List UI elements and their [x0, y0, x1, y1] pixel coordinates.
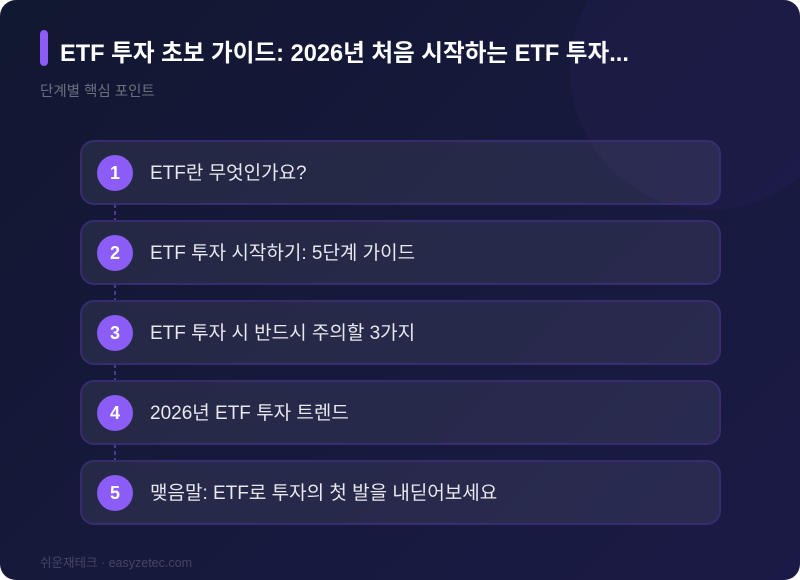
- connector 4-5: [114, 444, 116, 460]
- step 1 number badge: [97, 155, 133, 191]
- step 2 label: ETF 투자 시작하기: 5단계 가이드: [150, 243, 415, 264]
- step 1 number badge: 1: [110, 163, 120, 183]
- footer source: 쉬운재테크 · easyzetec.com: [40, 556, 192, 570]
- step 4 label: 2026년 ETF 투자 트렌드: [150, 403, 349, 424]
- title: ETF 투자 초보 가이드: 2026년 처음 시작하는 ETF 투자...: [60, 40, 629, 66]
- connector 2-3: [114, 284, 116, 300]
- step 2 number badge: [97, 235, 133, 271]
- step 2 number badge: 2: [110, 243, 120, 263]
- step 5: [80, 460, 720, 524]
- step 4 number badge: 4: [110, 403, 120, 423]
- connector 3-4: [114, 364, 116, 380]
- step 1 label: ETF란 무엇인가요?: [150, 163, 307, 184]
- subtitle: 단계별 핵심 포인트: [40, 84, 155, 100]
- step 4: [80, 380, 720, 444]
- step 3 label: ETF 투자 시 반드시 주의할 3가지: [150, 323, 415, 344]
- step 3 number badge: 3: [110, 323, 120, 343]
- title accent bar: [40, 30, 48, 66]
- step 3 number badge: [97, 315, 133, 351]
- step 5 label: 맺음말: ETF로 투자의 첫 발을 내딛어보세요: [150, 483, 497, 504]
- decorative circle: [570, 0, 800, 210]
- step 3: [80, 300, 720, 364]
- step 1: [80, 140, 720, 204]
- step 4 number badge: [97, 395, 133, 431]
- step 5 number badge: [97, 475, 133, 511]
- step 2: [80, 220, 720, 284]
- step 5 number badge: 5: [110, 483, 120, 503]
- connector 1-2: [114, 204, 116, 220]
